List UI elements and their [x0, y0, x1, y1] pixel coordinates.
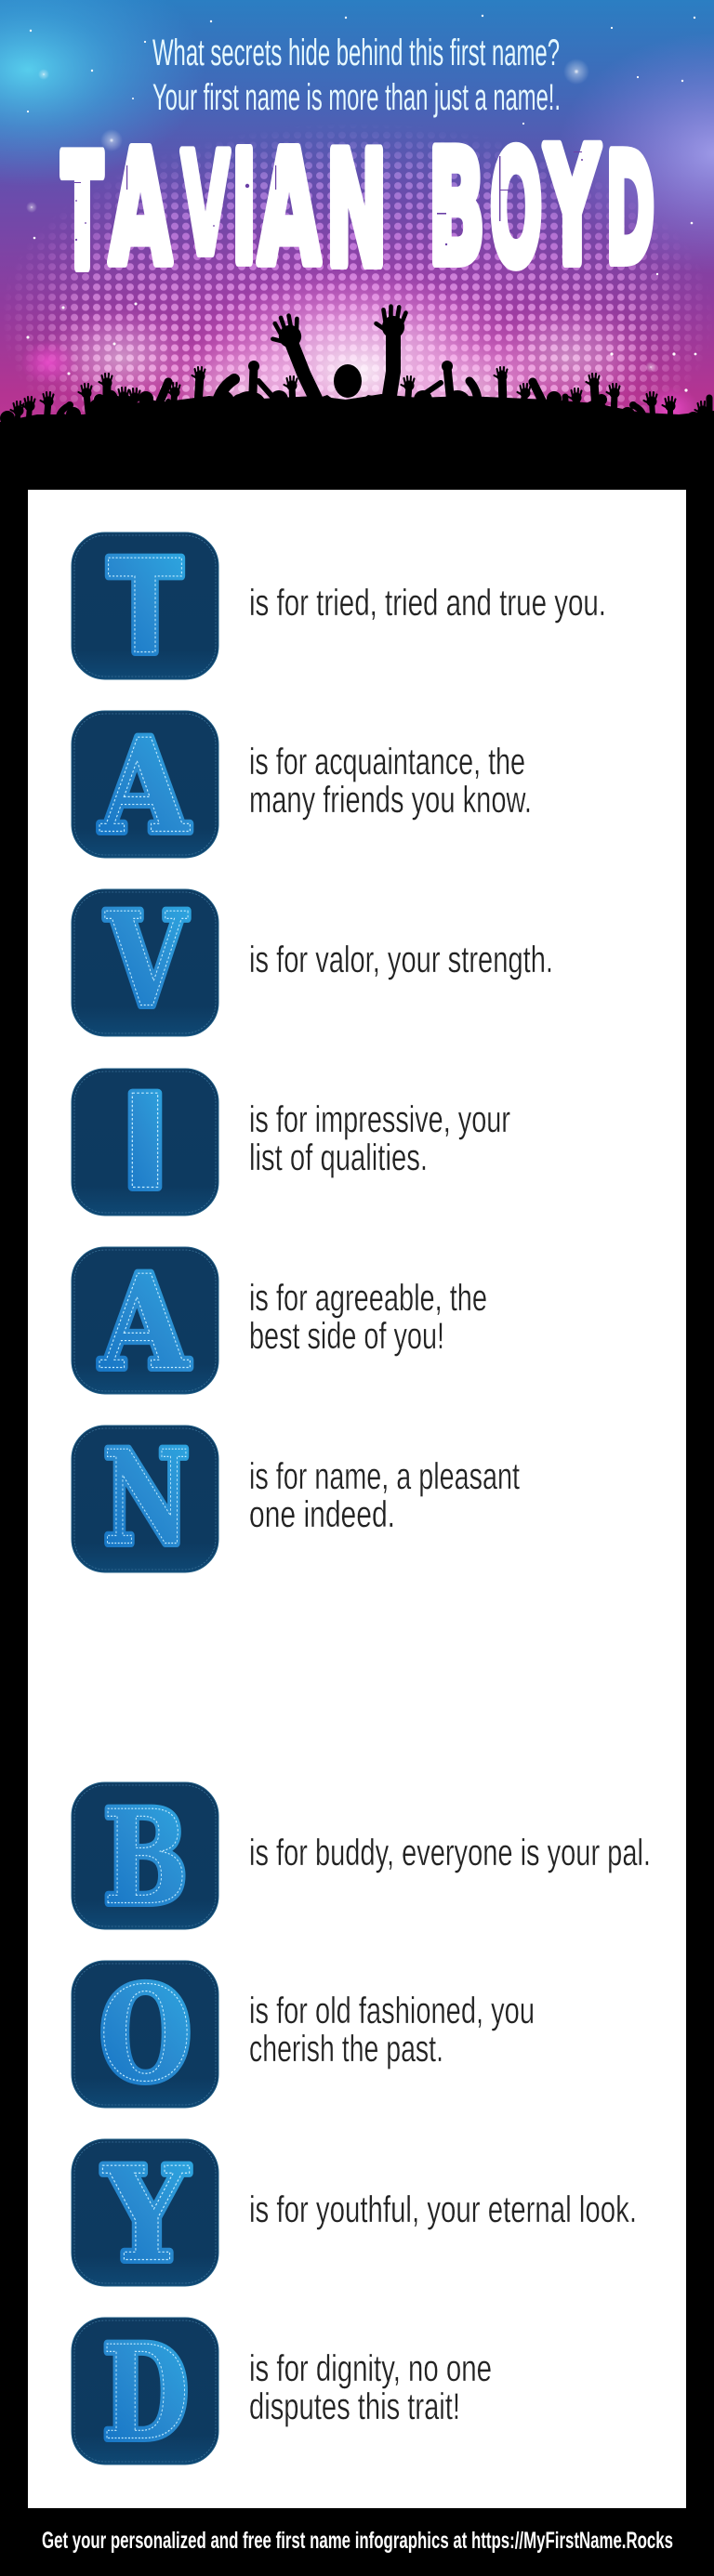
text: D lines: disputes this trait!	[249, 2386, 460, 2427]
icon: letter I	[72, 1067, 218, 1217]
icon: letter D: D	[102, 2316, 189, 2468]
text: I lines: list of qualities.	[249, 1137, 428, 1178]
row: D	[72, 2316, 218, 2468]
row: A	[72, 710, 218, 862]
row: V	[72, 883, 218, 1036]
title: TAVIAN BOYD: D	[605, 122, 654, 298]
panel: white card	[28, 490, 686, 2508]
text: N lines	[249, 1456, 520, 1535]
header: concert stage background	[0, 0, 714, 422]
icon: letter A: A	[99, 1245, 191, 1398]
icon: letter V: V	[105, 883, 188, 1035]
row: I	[72, 1067, 218, 1217]
text: D lines	[249, 2348, 492, 2427]
icon: letter O: O	[99, 1957, 192, 2109]
icon: letter B: B	[103, 1781, 188, 1933]
icon: letter T: T	[108, 532, 182, 682]
text: I lines	[249, 1099, 510, 1178]
icon: letter A	[72, 710, 218, 862]
icon: letter N: N	[103, 1422, 190, 1574]
icon: letter V	[72, 883, 218, 1036]
icon: letter T	[72, 532, 218, 682]
text: A lines	[249, 742, 532, 821]
row: T	[72, 532, 218, 682]
icon: letter T: T	[108, 532, 182, 682]
title: TAVIAN BOYD: I	[231, 121, 257, 298]
title: TAVIAN BOYD: A	[110, 118, 171, 299]
icon: letter A: A	[99, 710, 191, 862]
icon: letter I: I	[120, 1067, 170, 1217]
text: N lines: one indeed.	[249, 1494, 395, 1535]
row: A	[72, 1245, 218, 1398]
title: TAVIAN BOYD: V	[181, 125, 230, 286]
text: I lines: is for impressive, your	[249, 1099, 510, 1140]
text: D lines: is for dignity, no one	[249, 2348, 492, 2389]
crowd silhouette	[0, 305, 714, 493]
text: A lines: is for acquaintance, the	[249, 742, 525, 782]
text: O lines: cherish the past.	[249, 2029, 443, 2070]
text: O lines: is for old fashioned, you	[249, 1991, 535, 2031]
icon: letter B: B	[103, 1781, 188, 1933]
subtitle	[152, 33, 561, 118]
title: TAVIAN BOYD: Y	[544, 113, 601, 300]
icon: letter O: O	[99, 1957, 192, 2109]
icon: letter N: N	[103, 1422, 190, 1574]
icon: letter A: A	[99, 710, 191, 862]
icon: letter Y: Y	[102, 2137, 190, 2290]
text: O lines	[249, 1991, 535, 2070]
title: TAVIAN BOYD	[61, 113, 654, 305]
sparkles	[26, 15, 696, 392]
title: TAVIAN BOYD: O	[490, 119, 542, 301]
text: N lines: is for name, a pleasant	[249, 1456, 520, 1497]
text: A lines: is for agreeable, the	[249, 1278, 487, 1319]
text: A lines: best side of you!	[249, 1316, 444, 1357]
icon: letter A: A	[99, 1245, 191, 1398]
row: B	[72, 1781, 218, 1933]
icon: letter Y	[72, 2137, 218, 2290]
title: TAVIAN BOYD: T	[61, 123, 103, 305]
icon: letter A	[72, 1245, 218, 1398]
text: A lines	[249, 1278, 487, 1357]
title: TAVIAN BOYD: A	[258, 118, 320, 299]
row: N	[72, 1422, 218, 1574]
text: A lines: many friends you know.	[249, 780, 532, 821]
icon: letter D: D	[102, 2316, 189, 2468]
icon: letter I: I	[120, 1067, 170, 1217]
text: V line: is for valor, your strength.	[249, 940, 553, 980]
row: O	[72, 1957, 218, 2109]
row: Y	[72, 2137, 218, 2290]
icon: letter V: V	[105, 883, 188, 1035]
hands, arms and heads of the crowd	[16, 336, 709, 429]
title: TAVIAN BOYD: B	[428, 119, 485, 300]
title: TAVIAN BOYD: N	[325, 119, 388, 301]
icon: letter Y: Y	[102, 2137, 190, 2290]
